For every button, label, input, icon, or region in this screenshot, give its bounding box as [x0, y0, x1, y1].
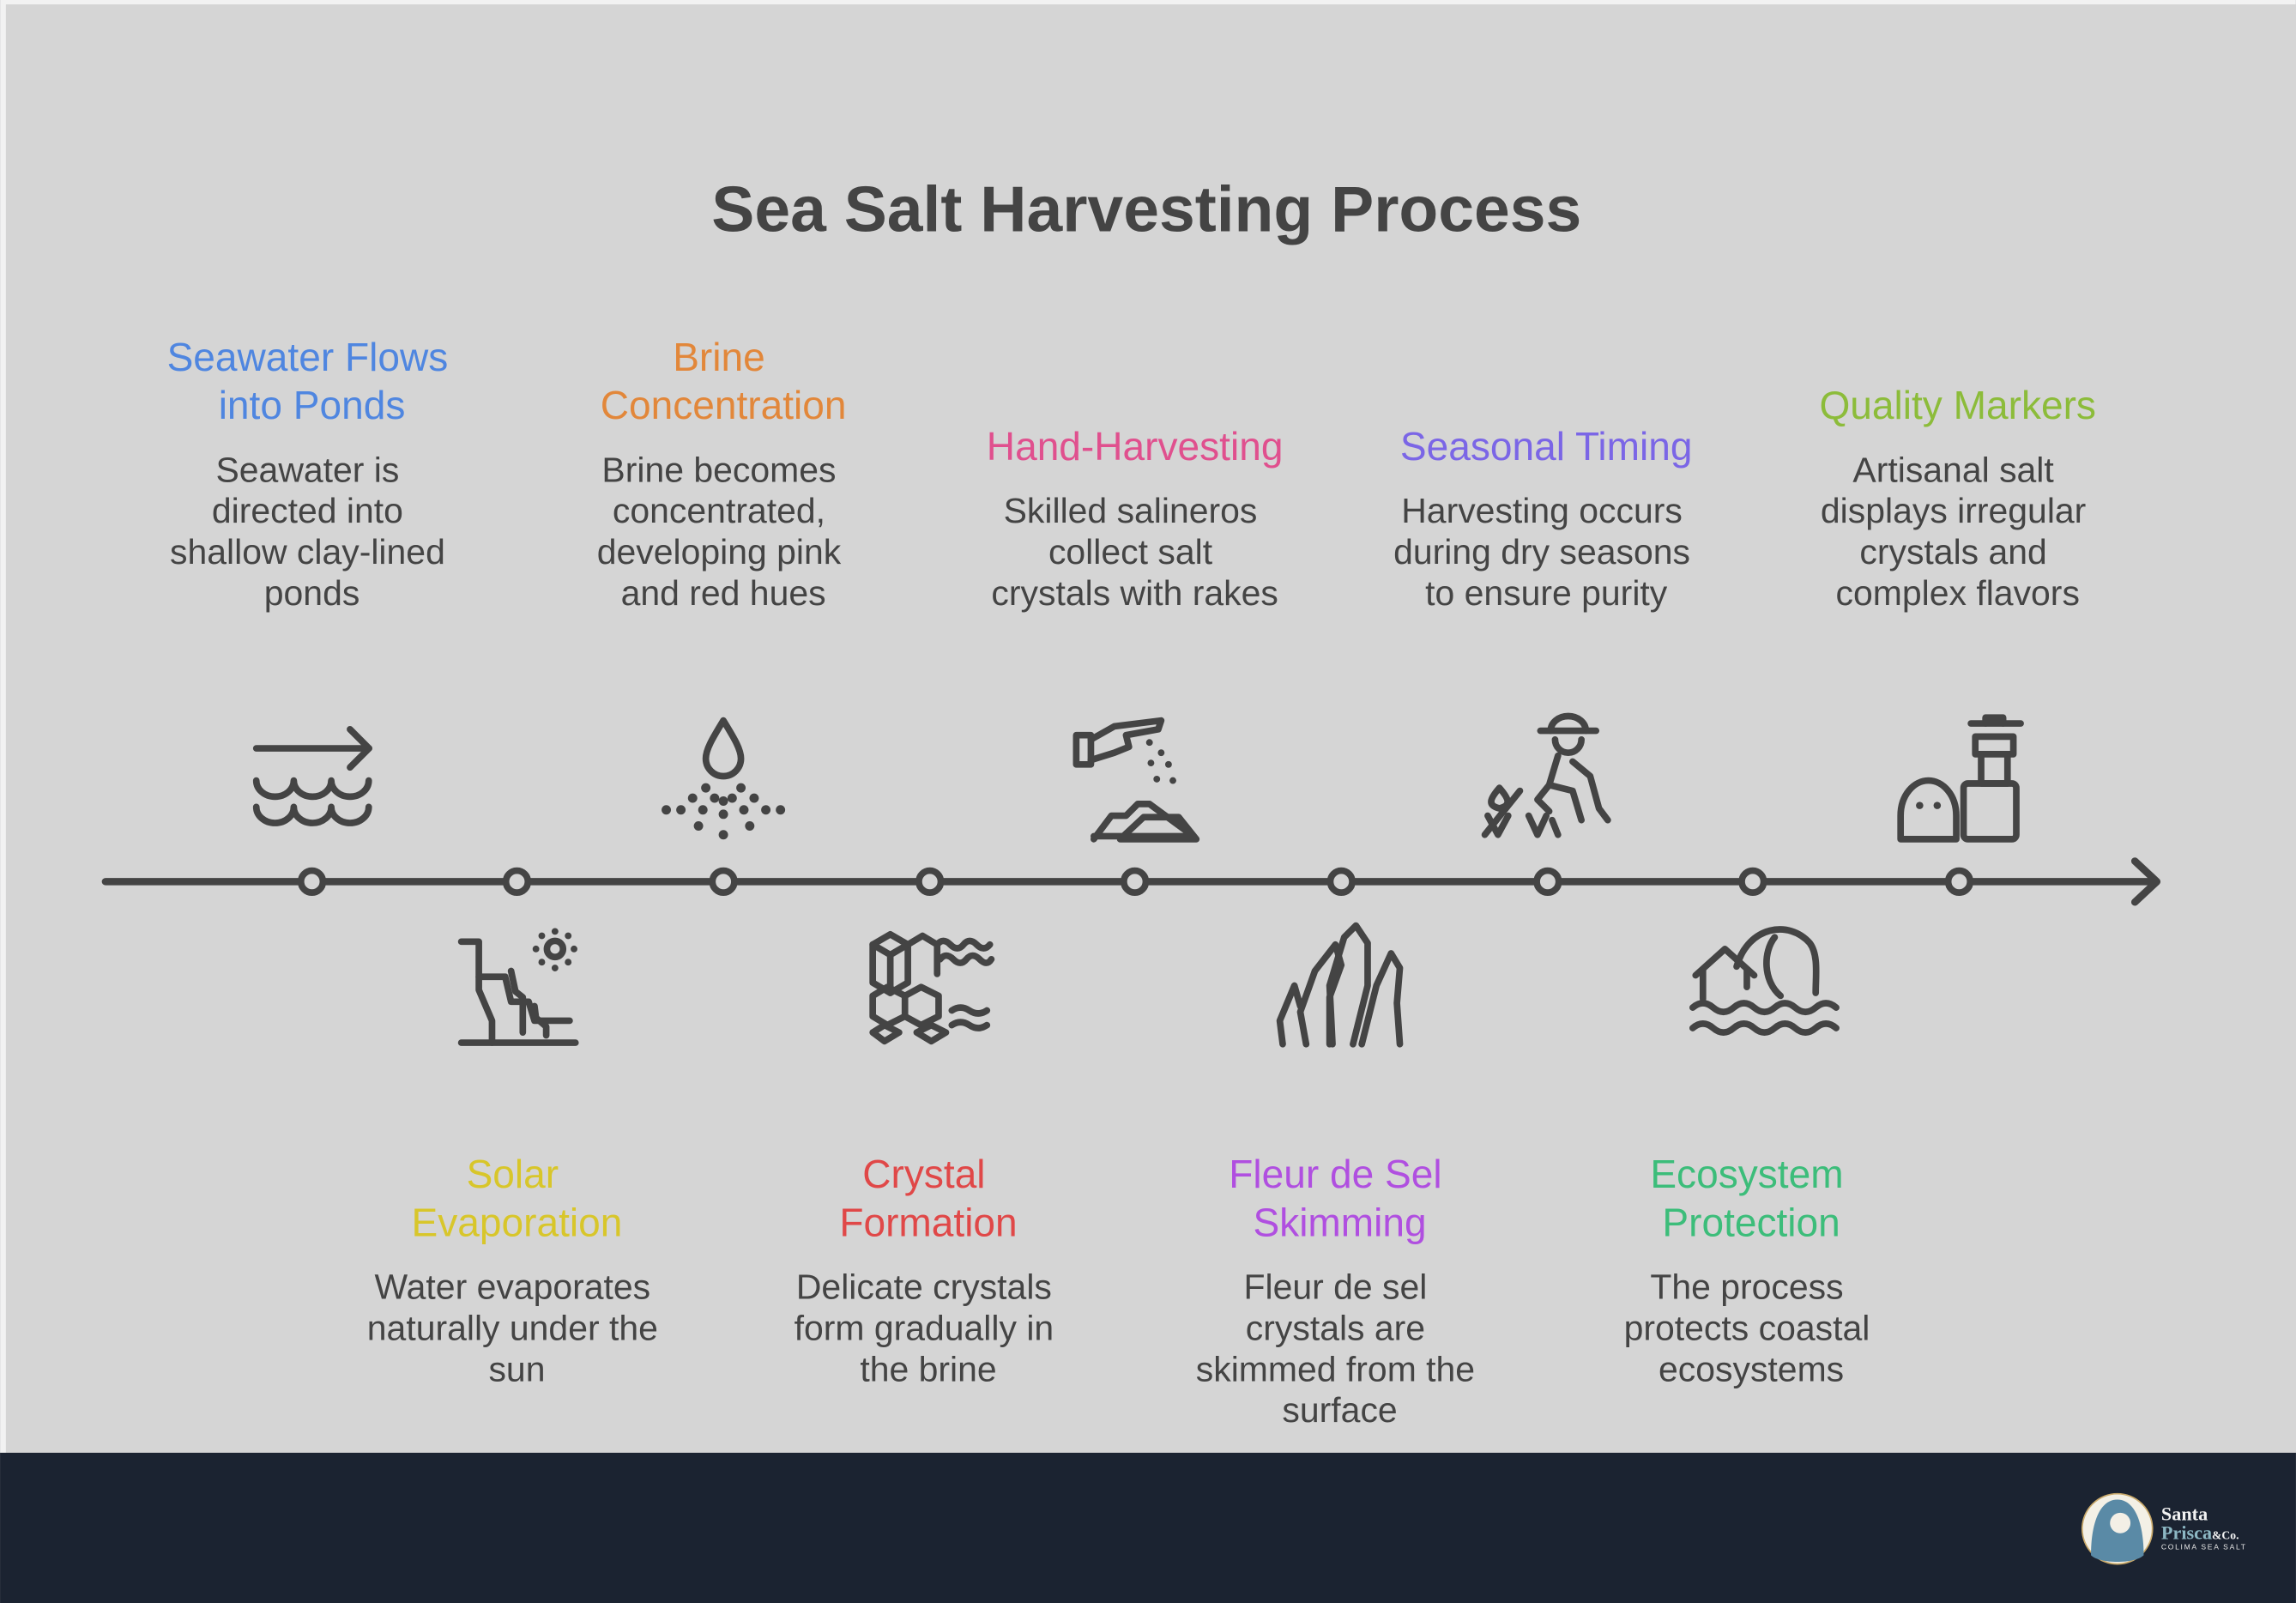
title: Sea Salt Harvesting Process — [711, 173, 1581, 245]
step 5: hand-harvesting: crystals with rakes — [991, 573, 1278, 613]
icon: crystal formation — [873, 935, 991, 1041]
step 7: seasonal timing — [1393, 424, 1692, 613]
step 7: seasonal timing: Harvesting occurs — [1401, 491, 1683, 530]
step 7: seasonal timing: Seasonal Timing — [1400, 424, 1692, 469]
step 2: solar evaporation: Evaporation — [412, 1200, 622, 1244]
step 5: hand-harvesting: Skilled salineros — [1004, 491, 1257, 530]
step 6: fleur de sel — [1196, 1152, 1475, 1430]
icon: hand harvesting — [1076, 721, 1196, 839]
step 6: fleur de sel: Fleur de Sel — [1229, 1152, 1442, 1196]
step 3: brine concentration: Brine becomes — [601, 450, 837, 489]
icon: fleur de sel crystals — [1280, 926, 1400, 1044]
step 8: ecosystem protection — [1624, 1152, 1870, 1388]
step 6: fleur de sel: Fleur de sel — [1243, 1267, 1427, 1307]
step 6: fleur de sel: Skimming — [1253, 1200, 1427, 1244]
step 1: seawater flows: Seawater Flows — [167, 335, 448, 379]
step 8: ecosystem protection: Protection — [1662, 1200, 1840, 1244]
step 8: ecosystem protection: The process — [1650, 1267, 1844, 1307]
step 3: brine concentration: concentrated, — [613, 491, 825, 530]
step 5: hand-harvesting: Hand-Harvesting — [987, 424, 1283, 469]
logo: COLIMA SEA SALT — [2161, 1543, 2247, 1552]
icon: ecosystem house and wave — [1693, 929, 1836, 1032]
step 7: seasonal timing: during dry seasons — [1393, 532, 1690, 572]
step 7: seasonal timing: to ensure purity — [1425, 573, 1668, 613]
step 9: quality markers: crystals and — [1859, 532, 2047, 572]
step 1: seawater flows — [167, 335, 448, 613]
logo: Prisca&Co. — [2161, 1522, 2239, 1544]
step 4: crystal formation: form gradually in — [795, 1309, 1054, 1348]
step 9: quality markers: Artisanal salt — [1852, 450, 2054, 489]
icon: brine drop — [662, 721, 785, 839]
step 6: fleur de sel: skimmed from the — [1196, 1349, 1475, 1388]
step 2: solar evaporation — [367, 1152, 658, 1388]
step 3: brine concentration: Concentration — [601, 383, 846, 427]
step 8: ecosystem protection: Ecosystem — [1650, 1152, 1844, 1196]
step 9: quality markers: Quality Markers — [1819, 383, 2096, 427]
icon: quality markers salt grinder — [1900, 717, 2021, 839]
step 6: fleur de sel: crystals are — [1246, 1309, 1425, 1348]
step 2: solar evaporation: naturally under the — [367, 1309, 658, 1348]
step 1: seawater flows: ponds — [264, 573, 360, 613]
step 9: quality markers — [1819, 383, 2096, 613]
step 1: seawater flows: into Ponds — [219, 383, 405, 427]
step 4: crystal formation — [795, 1152, 1054, 1388]
step 9: quality markers: displays irregular — [1821, 491, 2086, 530]
step 4: crystal formation: Formation — [839, 1200, 1018, 1244]
step 8: ecosystem protection: protects coastal — [1624, 1309, 1870, 1348]
step 2: solar evaporation: sun — [488, 1349, 545, 1388]
step 9: quality markers: complex flavors — [1836, 573, 2080, 613]
step 5: hand-harvesting — [987, 424, 1283, 613]
step 3: brine concentration — [597, 335, 846, 613]
step 5: hand-harvesting: collect salt — [1048, 532, 1213, 572]
icon: waves with arrow — [257, 729, 369, 823]
logo: Santa — [2161, 1503, 2208, 1524]
step 6: fleur de sel: surface — [1282, 1390, 1398, 1430]
step 3: brine concentration: Brine — [673, 335, 765, 379]
icon: sun over cliffs — [462, 928, 577, 1043]
step 4: crystal formation: Delicate crystals — [796, 1267, 1052, 1307]
step 1: seawater flows: shallow clay-lined — [170, 532, 445, 572]
step 2: solar evaporation: Solar — [467, 1152, 559, 1196]
step 3: brine concentration: developing pink — [597, 532, 842, 572]
step 3: brine concentration: and red hues — [621, 573, 826, 613]
step 8: ecosystem protection: ecosystems — [1659, 1349, 1844, 1388]
step 1: seawater flows: Seawater is — [215, 450, 399, 489]
step 4: crystal formation: Crystal — [862, 1152, 986, 1196]
step 4: crystal formation: the brine — [860, 1349, 997, 1388]
icon: seasonal timing farmer — [1485, 717, 1608, 835]
step 2: solar evaporation: Water evaporates — [375, 1267, 650, 1307]
step 1: seawater flows: directed into — [212, 491, 403, 530]
timeline arrow — [106, 861, 2157, 902]
logo — [2082, 1494, 2247, 1564]
